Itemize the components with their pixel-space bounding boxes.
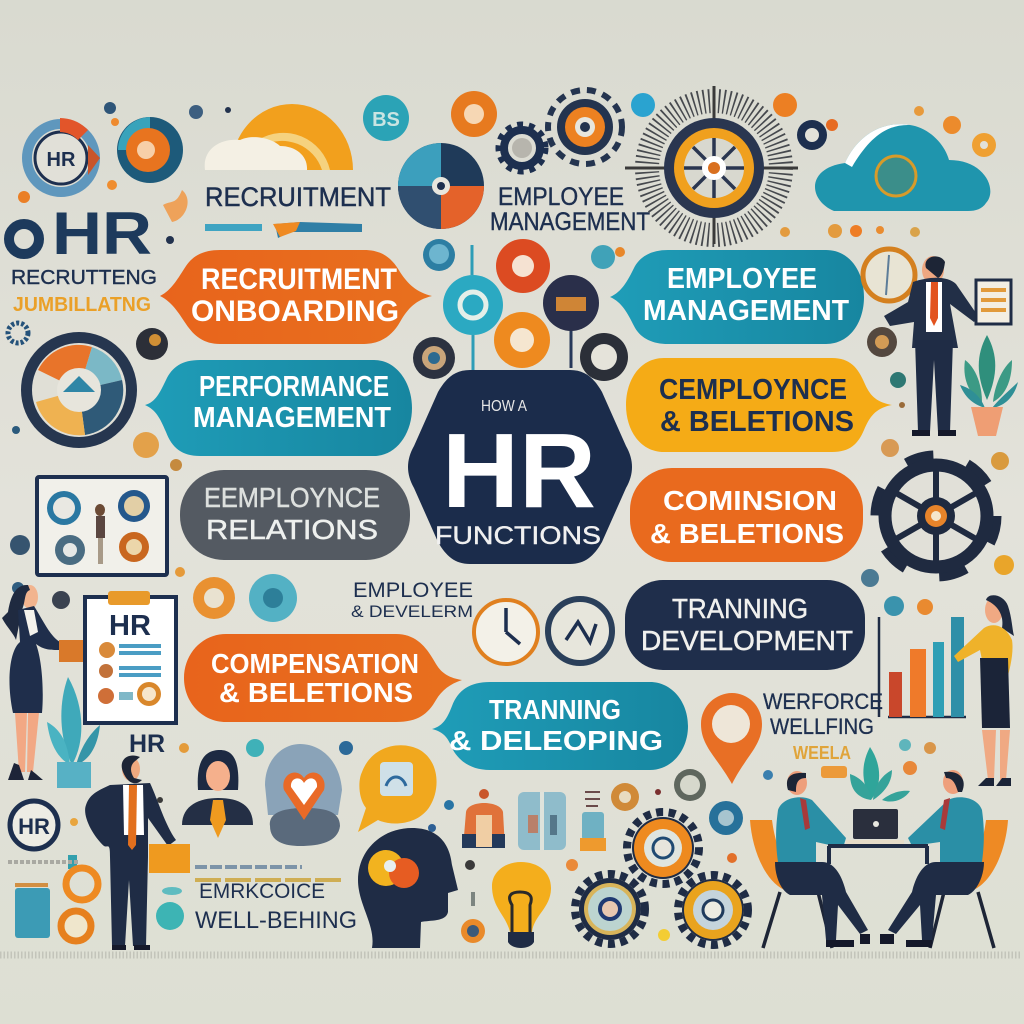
icon: plant right bbox=[960, 335, 1018, 436]
icon: teal circle top bbox=[363, 95, 409, 141]
bubble: training and developing: TRANNING bbox=[489, 694, 621, 725]
icon: orange badge top bbox=[451, 91, 497, 137]
bar chart right bbox=[879, 617, 966, 717]
icon: teal cloud bbox=[815, 124, 990, 211]
icon: HR circle badge bbox=[10, 801, 58, 849]
heading: workforce well-being: EMRKCOICE bbox=[199, 880, 325, 903]
bubble: performance management: PERFORMANCE bbox=[199, 371, 389, 403]
center hub: HR bbox=[442, 412, 596, 530]
small icons mid left bbox=[10, 426, 182, 555]
heading: employee management: MANAGEMENT bbox=[490, 208, 650, 236]
label: employee develem: EMPLOYEE bbox=[353, 579, 473, 602]
small icon near bulb bbox=[461, 892, 485, 943]
bubble: recruitment onboarding: RECRUITMENT bbox=[201, 263, 397, 296]
heading: employee management: EMPLOYEE bbox=[498, 183, 624, 211]
bubble: compensation and relations: COMINSION bbox=[663, 485, 837, 516]
right chair bbox=[934, 820, 1008, 892]
small icons right bbox=[861, 327, 1014, 616]
left man bbox=[787, 771, 807, 795]
icon: teal card bbox=[580, 792, 606, 851]
icon: sunrise cloud bbox=[205, 104, 353, 170]
bubble: compliance and relations bbox=[626, 358, 892, 452]
icon: blue figures bbox=[518, 792, 566, 850]
bubble: employee relations bbox=[180, 470, 410, 560]
small icons below board bbox=[12, 567, 297, 622]
label: workforce wellbeing right bbox=[763, 689, 936, 780]
bubble: performance management: MANAGEMENT bbox=[193, 402, 391, 434]
figure: man with briefcase bbox=[85, 755, 190, 950]
icon: woman avatar bbox=[182, 750, 253, 838]
icon: leaf sprig bbox=[850, 747, 910, 802]
icon: yellow speech bubble bbox=[358, 745, 437, 832]
laptop bbox=[853, 809, 898, 839]
icon: small orange circle bbox=[773, 93, 797, 117]
bubble: employee management bbox=[610, 250, 864, 344]
cluster: center top icons bbox=[413, 239, 628, 381]
icon: map pin bbox=[701, 693, 762, 784]
bubble: employee management: EMPLOYEE bbox=[667, 263, 817, 295]
bubble: compliance and relations: CEMPLOYNCE bbox=[659, 374, 847, 406]
icon: pie wheel bbox=[398, 143, 484, 229]
icon: orange figure bbox=[462, 789, 505, 848]
scattered icons top right bbox=[780, 106, 996, 238]
icon: HR clipboard bbox=[85, 591, 176, 723]
right man bbox=[943, 770, 963, 794]
icon: sunburst compass bbox=[625, 86, 798, 244]
gear: bottom left bbox=[575, 874, 645, 944]
figure: woman with clipboard left bbox=[2, 585, 93, 780]
board panel left bbox=[37, 477, 167, 575]
bubble: training and developing: & DELEOPING bbox=[449, 725, 663, 756]
heading: oHR: HR bbox=[52, 200, 152, 267]
icon: clock bbox=[474, 600, 538, 664]
bubble: compensation: & BELETIONS bbox=[219, 677, 413, 708]
heading: employee management bbox=[490, 183, 650, 236]
bubble: recruitment onboarding: ONBOARDING bbox=[191, 295, 399, 328]
label: workforce wellbeing right: WEELA bbox=[793, 743, 851, 763]
bubble: employee relations: EEMPLOYNCE bbox=[204, 482, 380, 513]
icon: plant left bbox=[47, 677, 100, 788]
bubble: compensation and relations bbox=[630, 468, 863, 562]
gear: center bottom bbox=[627, 812, 699, 884]
bubble: compliance and relations: & BELETIONS bbox=[660, 406, 854, 438]
bars under recruitment bbox=[205, 222, 362, 238]
lines above well-being bbox=[195, 867, 345, 880]
center hub bbox=[408, 370, 632, 564]
figure: man with magnifier right bbox=[863, 249, 978, 436]
icon: small blue circle bbox=[631, 93, 655, 117]
icon: teal circle glyph: BS bbox=[372, 109, 400, 131]
small items row bbox=[68, 739, 353, 869]
icons: lower left stack bbox=[8, 862, 98, 941]
label: workforce wellbeing right: WERFORCE bbox=[763, 689, 883, 714]
gear: large right bbox=[876, 456, 996, 576]
icon: small gear top bbox=[498, 124, 546, 172]
icon: donut chart left bbox=[21, 332, 137, 448]
icon: teal drop badge bbox=[156, 887, 184, 930]
label: onboarding: JUMBILLATNG bbox=[13, 294, 151, 316]
bubble: performance management bbox=[145, 360, 412, 456]
bubble: recruitment onboarding bbox=[160, 250, 432, 344]
heading: workforce well-being: WELL-BEHING bbox=[195, 907, 357, 934]
bubble: training development: DEVELOPMENT bbox=[641, 625, 853, 656]
label: workforce wellbeing right: WELLFING bbox=[770, 714, 874, 739]
small icons left bbox=[8, 102, 231, 360]
icon: light bulb bbox=[492, 862, 551, 948]
heading: small HR: HR bbox=[129, 730, 165, 758]
bubble: training development: TRANNING bbox=[672, 593, 808, 624]
heading: workforce well-being bbox=[195, 880, 357, 934]
icon: HR clipboard: HR bbox=[109, 610, 151, 642]
label: employee develem bbox=[351, 579, 473, 621]
icon: report board bbox=[976, 280, 1011, 324]
heading: oHR bbox=[9, 200, 152, 267]
bubble: compensation bbox=[184, 634, 462, 722]
label: recruiting: RECRUTTENG bbox=[11, 267, 157, 289]
icon: HR ring top left: HR bbox=[47, 149, 76, 171]
icon: teal orange badge bbox=[117, 117, 183, 183]
floor speckle band bbox=[0, 952, 1020, 958]
icon: head with gears bbox=[358, 828, 458, 948]
icon: dial bbox=[548, 599, 612, 663]
center hub: FUNCTIONS bbox=[435, 522, 601, 550]
icon: heart head bbox=[265, 744, 342, 846]
meeting scene bbox=[750, 770, 1008, 948]
left chair bbox=[750, 820, 827, 892]
figure: woman presenting right bbox=[954, 595, 1014, 786]
icon: large gear top bbox=[548, 90, 622, 164]
bubble: employee management: MANAGEMENT bbox=[643, 295, 849, 327]
icon: HR circle badge: HR bbox=[18, 814, 50, 839]
label: employee develem: & DEVELERM bbox=[351, 602, 473, 621]
bubble: compensation: COMPENSATION bbox=[211, 648, 419, 679]
bubble: employee relations: RELATIONS bbox=[206, 514, 378, 545]
small icons under bubbles bbox=[428, 769, 743, 941]
icon: HR ring top left bbox=[27, 118, 100, 192]
gear: bottom right bbox=[678, 875, 748, 945]
table bbox=[828, 844, 928, 848]
heading: recruitment: RECRUITMENT bbox=[205, 182, 391, 212]
center hub: HOW A bbox=[481, 398, 527, 415]
bubble: training development bbox=[625, 580, 865, 670]
bubble: training and developing bbox=[432, 682, 688, 770]
bubble: compensation and relations: & BELETIONS bbox=[650, 518, 844, 549]
